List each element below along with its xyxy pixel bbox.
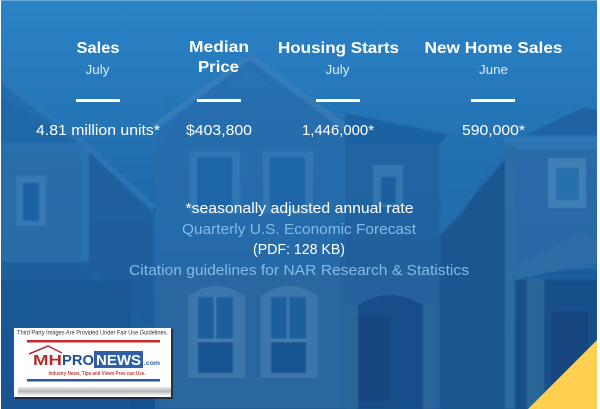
- column: Sales: [36, 40, 160, 139]
- column: Sales: Sales: [76, 40, 120, 57]
- centre house: [152, 53, 448, 409]
- footnote text block: Quarterly U.S. Economic Forecast: [182, 221, 417, 238]
- column: Sales: July: [86, 62, 110, 77]
- logo wordmark: MH: [33, 352, 62, 369]
- logo wordmark: PRO: [62, 352, 94, 369]
- tagline: Industry News, Tips and Views Pros can Use.: [48, 371, 146, 377]
- footnote text block: *seasonally adjusted annual rate: [186, 200, 414, 217]
- icon: roof: [29, 346, 62, 354]
- column: Median Price: Median: [189, 39, 249, 56]
- logo wordmark: .com: [144, 360, 160, 367]
- column: Housing Starts: [278, 40, 399, 139]
- column: Median Price: Price: [198, 59, 239, 76]
- disclaimer text: Third Party Images Are Provided Under Fair Use Guidelines.: [17, 330, 168, 336]
- logo wordmark: NEWS: [96, 352, 141, 369]
- MHProNews logo badge: [14, 328, 173, 399]
- column: Housing Starts: Housing Starts: [278, 40, 399, 57]
- footnote text block: [129, 200, 469, 279]
- column: New Home Sales: New Home Sales: [424, 40, 563, 57]
- footnote text block: (PDF: 128 KB): [253, 241, 345, 258]
- column: Housing Starts: 1,446,000*: [302, 122, 374, 139]
- column: New Home Sales: [424, 40, 563, 139]
- column: Median Price: $403,800: [186, 122, 252, 139]
- column: New Home Sales: 590,000*: [462, 122, 525, 139]
- column: Sales: 4.81 million units*: [36, 122, 160, 139]
- column: Housing Starts: July: [326, 62, 350, 77]
- column: Median Price: [186, 39, 252, 139]
- right house: [440, 107, 597, 409]
- yellow corner triangle: [528, 340, 597, 409]
- front door porch: [340, 270, 440, 409]
- logo wordmark: [33, 351, 160, 369]
- left house: [1, 76, 155, 409]
- footnote text block: Citation guidelines for NAR Research & Statistics: [129, 262, 469, 279]
- arched windows: [188, 286, 318, 378]
- column: New Home Sales: June: [479, 62, 508, 77]
